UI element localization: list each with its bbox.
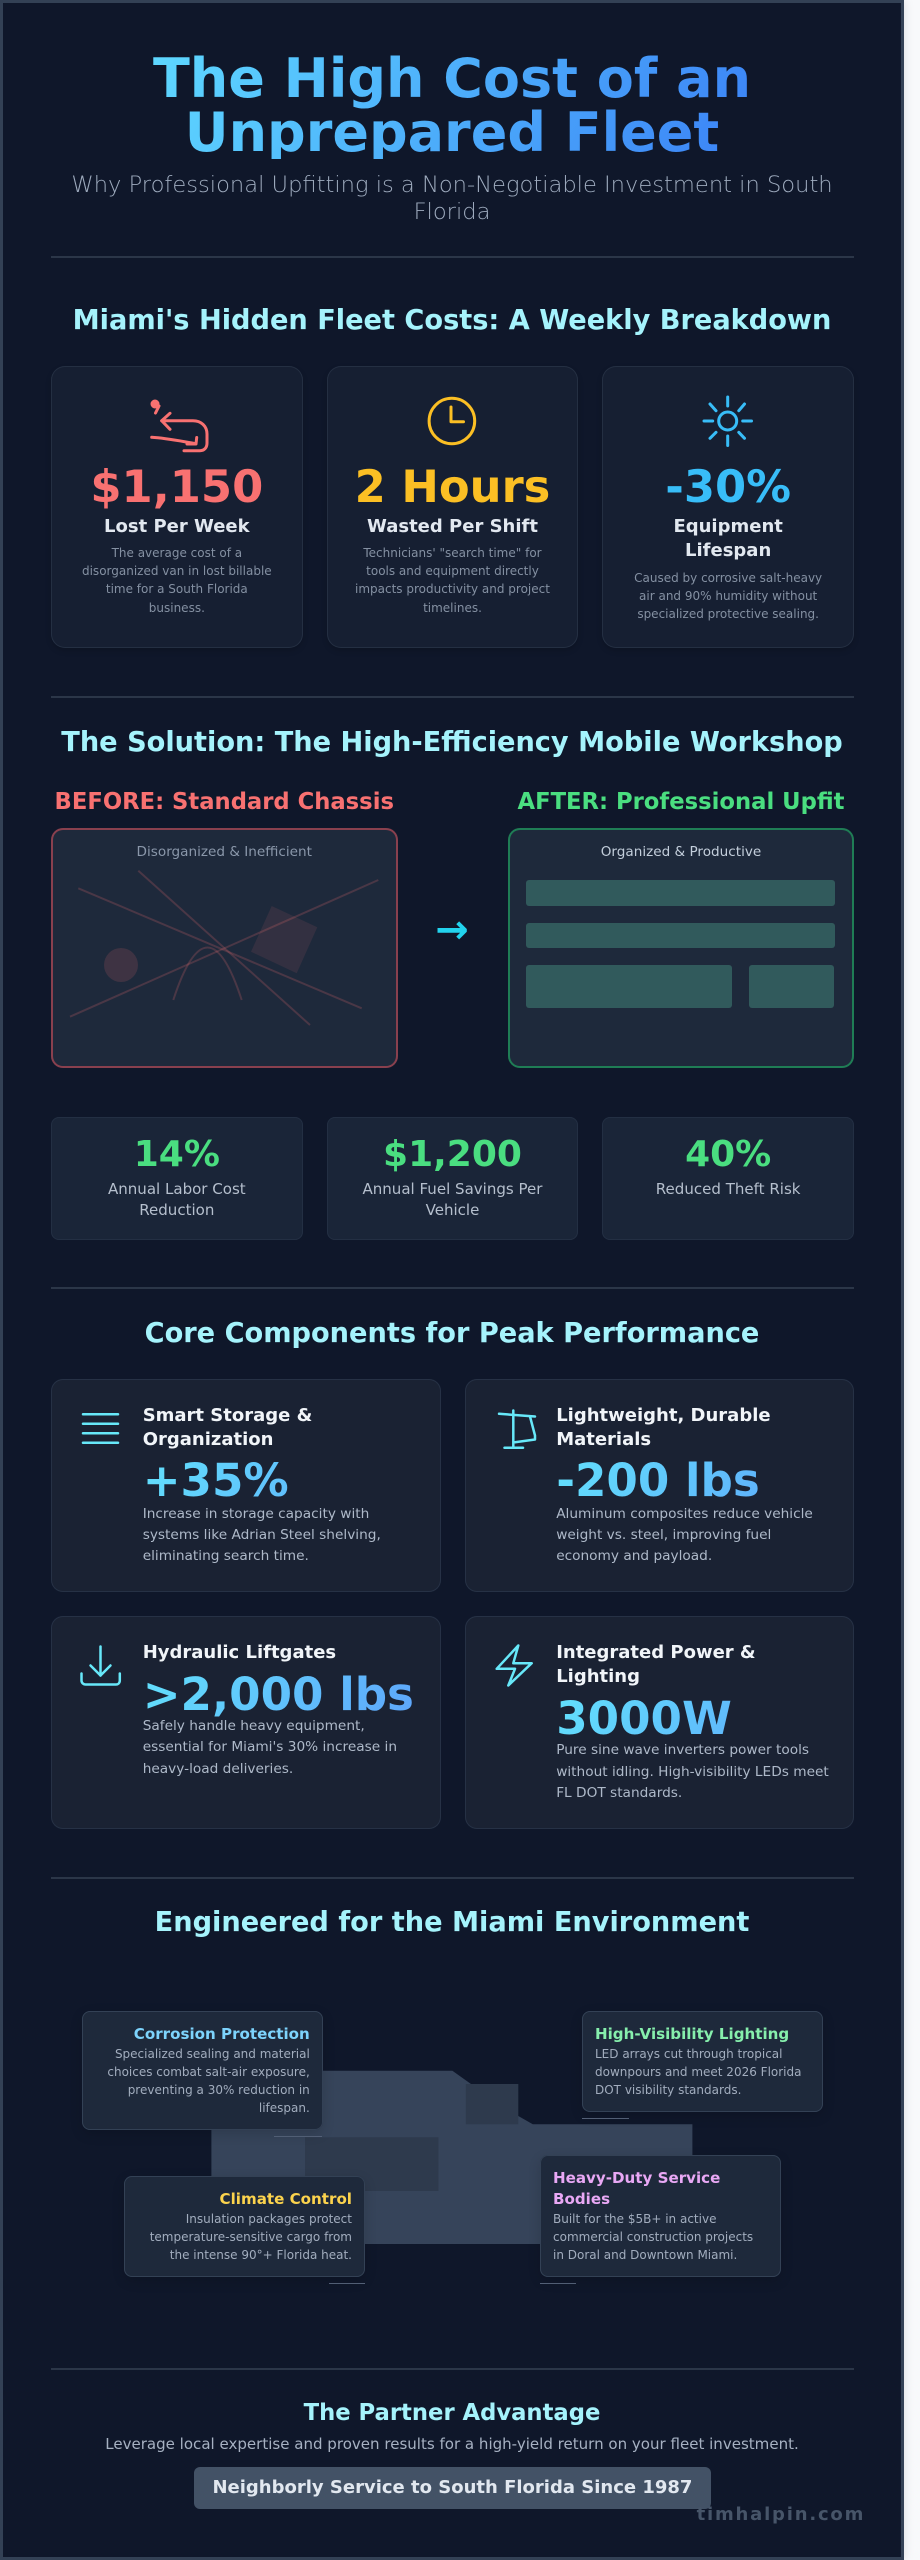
description — [82, 546, 272, 615]
description: commercial construction projects — [553, 2230, 753, 2244]
value: -200 lbs — [556, 1454, 760, 1507]
value — [556, 1692, 830, 1746]
title: Lightweight, Durable — [556, 1405, 771, 1426]
panel: hydraulic liftgates — [51, 1616, 440, 1829]
title: Lighting — [556, 1666, 640, 1687]
text: partner summary: Leverage local expertise and proven results for a high-yield return on your fleet investment. — [105, 2435, 799, 2453]
description: temperature-sensitive cargo from — [150, 2230, 352, 2244]
description — [143, 1506, 381, 1564]
label: lost per week: Lost Per Week — [104, 516, 250, 537]
description: timelines. — [423, 601, 482, 615]
description: systems like Adrian Steel shelving, — [143, 1527, 381, 1543]
value: 14% — [134, 1134, 220, 1175]
value: $1,200 — [383, 1134, 522, 1175]
title: Unprepared Fleet — [185, 100, 719, 164]
bin: small — [749, 965, 834, 1008]
title — [556, 1405, 771, 1450]
title: Integrated Power & — [556, 1642, 756, 1663]
label: Vehicle — [426, 1200, 479, 1218]
description — [355, 546, 550, 615]
icon: lightning bolt — [495, 1644, 533, 1687]
description: eliminating search time. — [143, 1548, 309, 1564]
shelf: middle — [526, 923, 834, 948]
caption: disorganized: Disorganized & Inefficient — [137, 844, 312, 860]
title: Heavy-Duty Service — [553, 2169, 720, 2187]
icon: sun — [702, 396, 753, 447]
description: DOT visibility standards. — [595, 2083, 741, 2097]
description — [143, 1718, 397, 1776]
heading: core components: Core Components for Peak Performance — [145, 1318, 759, 1349]
description: Technicians' "search time" for — [363, 546, 542, 560]
label: equipment lifespan — [673, 516, 783, 561]
stat box: theft risk — [602, 1117, 854, 1240]
title — [556, 1642, 756, 1687]
title — [143, 1405, 312, 1450]
title: Materials — [556, 1429, 651, 1450]
callout: climate control — [124, 2176, 365, 2277]
description: in Doral and Downtown Miami. — [553, 2248, 737, 2262]
stat: $1,150: $1,150 — [90, 460, 263, 512]
icon: download — [80, 1645, 122, 1686]
title: Climate Control — [220, 2190, 352, 2208]
stat box: labor cost — [51, 1117, 303, 1240]
icon: clock — [428, 396, 476, 446]
title: Organization — [143, 1429, 273, 1450]
watermark: timhalpin.com — [697, 2504, 865, 2525]
description: downpours and meet 2026 Florida — [595, 2065, 801, 2079]
description — [553, 2212, 753, 2262]
description — [556, 1742, 829, 1801]
description — [150, 2212, 352, 2262]
title: The High Cost of an — [153, 47, 751, 110]
description: Built for the $5B+ in active — [553, 2212, 716, 2226]
description: weight vs. steel, improving fuel — [556, 1527, 771, 1543]
description: Caused by corrosive salt-heavy — [634, 571, 822, 585]
description: The average cost of a — [112, 546, 242, 560]
label: Reduced Theft Risk — [656, 1180, 801, 1198]
panel: after diagram — [508, 828, 854, 1068]
heading: miami environment: Engineered for the Miami Environment — [155, 1907, 749, 1938]
description: time for a South Florida — [106, 582, 248, 596]
panel: wasted per shift — [327, 366, 578, 648]
title: Bodies — [553, 2190, 610, 2208]
description: Aluminum composites reduce vehicle — [556, 1506, 813, 1522]
title — [553, 2169, 720, 2208]
label: wasted per shift: Wasted Per Shift — [367, 516, 538, 537]
callout: heavy-duty service bodies — [540, 2155, 781, 2277]
description: air and 90% humidity without — [639, 589, 817, 603]
description — [556, 1506, 813, 1564]
description: Pure sine wave inverters power tools — [556, 1742, 809, 1758]
description: disorganized van in lost billable — [82, 564, 272, 578]
shelf: top — [526, 880, 834, 906]
illustration: scattered tools — [70, 870, 378, 1026]
arrow: before to after: → — [435, 907, 469, 953]
description: lifespan. — [259, 2101, 310, 2115]
description: preventing a 30% reduction in — [128, 2083, 310, 2097]
title: Corrosion Protection — [134, 2025, 310, 2043]
callout: corrosion protection — [82, 2011, 323, 2130]
value: +35% — [143, 1454, 289, 1507]
heading: weekly breakdown: Miami's Hidden Fleet Costs: A Weekly Breakdown — [73, 305, 831, 336]
description: specialized protective sealing. — [637, 607, 819, 621]
description: business. — [149, 601, 205, 615]
description: Insulation packages protect — [186, 2212, 352, 2226]
icon: return arrow — [150, 400, 208, 452]
value: 40% — [685, 1134, 771, 1175]
description: FL DOT standards. — [556, 1785, 682, 1801]
icon: menu lines — [82, 1413, 120, 1444]
label: Annual Labor Cost — [108, 1180, 246, 1198]
label: Reduction — [139, 1200, 214, 1218]
description: Specialized sealing and material — [115, 2047, 310, 2061]
heading: before: BEFORE: Standard Chassis — [55, 789, 394, 815]
description: essential for Miami's 30% increase in — [143, 1739, 397, 1755]
value: >2,000 lbs — [143, 1668, 414, 1720]
description: tools and equipment directly — [366, 564, 539, 578]
value — [143, 1454, 417, 1508]
label: equipment lifespan: Lifespan — [685, 540, 771, 561]
description — [634, 571, 822, 621]
panel: equipment lifespan — [602, 366, 854, 648]
badge: since 1987: Neighborly Service to South Florida Since 1987 — [212, 2477, 692, 2498]
label — [362, 1180, 542, 1218]
stat box: fuel savings — [327, 1117, 578, 1240]
panel: lost per week — [51, 366, 303, 648]
description: choices combat salt-air exposure, — [107, 2065, 310, 2079]
value: 3000W — [556, 1692, 732, 1744]
icon: scale — [498, 1409, 536, 1449]
bin: large — [526, 965, 732, 1008]
illustration: van silhouette — [211, 2070, 692, 2244]
callout: high-visibility lighting — [582, 2011, 823, 2112]
description: impacts productivity and project — [355, 582, 550, 596]
title — [153, 47, 751, 164]
description: heavy-load deliveries. — [143, 1760, 293, 1776]
panel: integrated power — [464, 1616, 854, 1829]
heading: the solution: The Solution: The High-Efficiency Mobile Workshop — [61, 727, 843, 758]
description: Increase in storage capacity with — [143, 1506, 369, 1522]
label — [108, 1180, 246, 1218]
subtitle: Why Professional Upfitting is a Non-Negotiable Investment in South — [71, 172, 833, 198]
description: the intense 90°+ Florida heat. — [170, 2248, 352, 2262]
description: without idling. High-visibility LEDs meet — [556, 1764, 829, 1780]
stat: -30%: -30% — [665, 460, 791, 512]
badge: since 1987 — [194, 2467, 711, 2509]
description — [595, 2047, 801, 2097]
heading: after: AFTER: Professional Upfit — [518, 789, 844, 815]
description: Safely handle heavy equipment, — [143, 1718, 365, 1734]
caption: organized: Organized & Productive — [601, 844, 761, 860]
title: Smart Storage & — [143, 1405, 312, 1426]
subtitle — [71, 172, 833, 225]
description — [107, 2047, 310, 2115]
description: economy and payload. — [556, 1548, 712, 1564]
title: Hydraulic Liftgates — [143, 1642, 336, 1663]
label: Annual Fuel Savings Per — [362, 1180, 542, 1198]
stat: 2 hours: 2 Hours — [355, 460, 550, 512]
description: LED arrays cut through tropical — [595, 2047, 782, 2061]
panel: lightweight materials — [464, 1379, 854, 1592]
label: equipment lifespan: Equipment — [673, 516, 783, 537]
subtitle: Florida — [414, 199, 490, 225]
panel: smart storage — [51, 1379, 440, 1592]
panel: before diagram — [51, 828, 398, 1068]
heading: partner advantage: The Partner Advantage — [304, 2400, 600, 2426]
title: High-Visibility Lighting — [595, 2025, 789, 2043]
